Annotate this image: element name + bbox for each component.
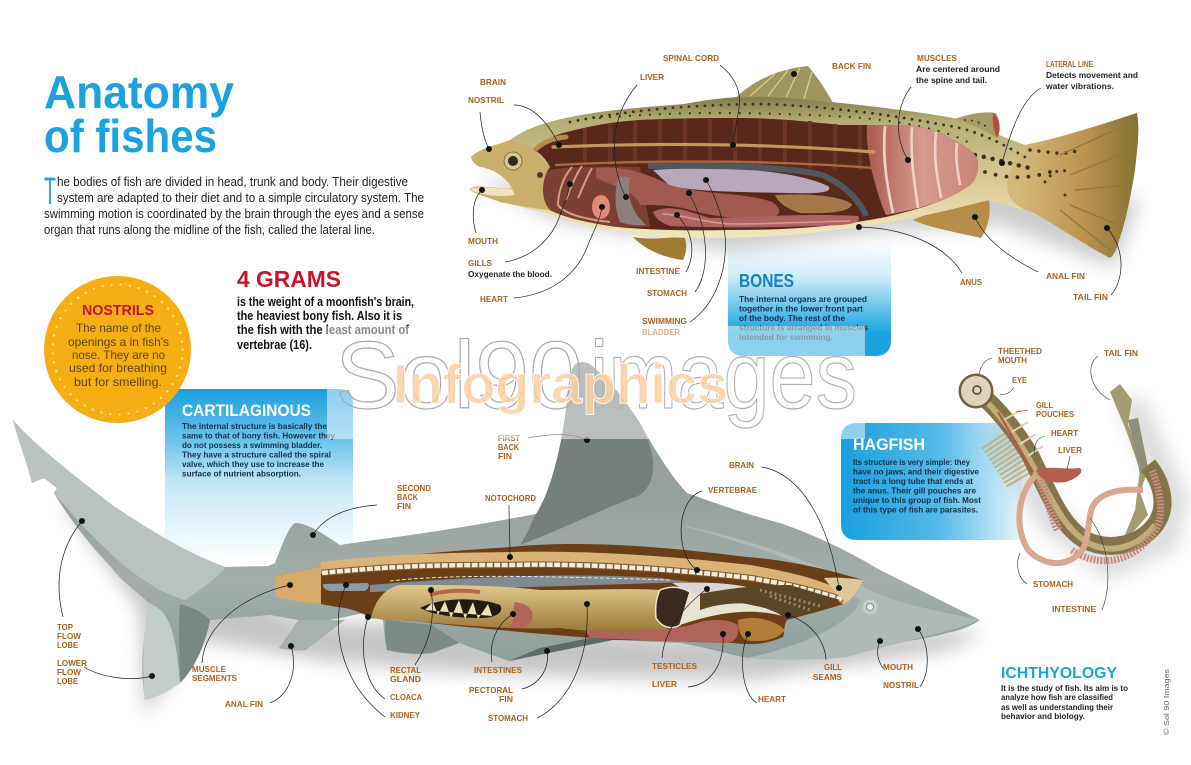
label: liver — [1058, 445, 1082, 470]
label: stomach: STOMACH — [647, 288, 687, 298]
hagfish liver — [1036, 468, 1081, 482]
label: vertebrae: VERTEBRAE — [708, 485, 757, 495]
watermark: Sol90 — [335, 322, 583, 429]
shark heart — [738, 618, 785, 641]
label: stomach — [1018, 553, 1073, 589]
trout lower fins — [633, 200, 990, 260]
text: hagfish description: of this type of fish are parasites. — [853, 504, 978, 514]
intro paragraph: organ that runs along the midline of the fish, called the lateral line. — [44, 223, 375, 237]
label: muscle segments: MUSCLE — [192, 664, 226, 674]
shark valve stomach opening — [656, 587, 690, 628]
label: swimming bladder: SWIMMING — [642, 316, 687, 326]
trout ribs — [585, 119, 860, 170]
label: stomach — [488, 601, 590, 723]
label: back fin: BACK FIN — [832, 61, 871, 71]
text: cartilaginous description: The internal structure is basically the — [182, 421, 327, 431]
trout spinal cord and rib rods — [535, 137, 874, 168]
label: nostril: NOSTRIL — [883, 680, 919, 690]
label: muscle segments — [192, 582, 293, 683]
intro paragraph — [44, 171, 424, 237]
trout intestine — [653, 208, 859, 227]
callout: ichthyology: It is the study of fish. Its aim is to — [1001, 683, 1128, 693]
trout liver — [616, 176, 646, 225]
trout tail rays — [1060, 122, 1132, 250]
text: bones description: structure is arranged in muscles — [739, 322, 868, 332]
label: nostril: NOSTRIL — [468, 95, 504, 105]
callout: nostrils: but for smelling. — [74, 375, 162, 389]
label: heart — [480, 204, 605, 304]
callout: 4 grams — [237, 266, 414, 352]
label: gill pouches — [1016, 400, 1074, 419]
shark spine — [321, 558, 848, 600]
text: bones description: The internal organs are grouped — [739, 294, 867, 304]
label: pectoral fin: PECTORAL — [469, 685, 513, 695]
shark gill seams area — [700, 585, 840, 620]
text: hagfish description: have no jaws, and their digestive — [853, 466, 979, 476]
label: notochord — [485, 493, 536, 560]
text: hagfish description — [853, 457, 981, 514]
label: lower flow lobe: LOWER — [57, 658, 87, 668]
label: mouth: MOUTH — [468, 236, 498, 246]
label: first back fin — [498, 433, 590, 461]
label: liver: LIVER — [652, 679, 677, 689]
title — [44, 66, 234, 162]
trout organ yellow-brown — [775, 194, 852, 213]
label: cloaca: CLOACA — [390, 692, 422, 702]
label: second back fin: SECOND — [397, 483, 431, 493]
label: anal fin: ANAL FIN — [225, 699, 263, 709]
label: lower flow lobe — [57, 658, 155, 686]
label: rectal gland: RECTAL — [390, 665, 421, 675]
label: muscles — [898, 53, 1000, 163]
label: notochord: NOTOCHORD — [485, 493, 536, 503]
trout back fin — [735, 66, 833, 103]
label: theethed mouth: THEETHED — [998, 346, 1042, 356]
label: tail fin — [1073, 225, 1121, 302]
label: anus: ANUS — [960, 277, 982, 287]
shark intestine and spiral valve — [371, 585, 672, 633]
trout swimming bladder — [653, 168, 829, 193]
label: mouth: MOUTH — [883, 662, 913, 672]
label: testicles — [652, 586, 710, 671]
label: heart: HEART — [1051, 428, 1079, 438]
text: hagfish description: unique to this group of fish. Most — [853, 495, 981, 505]
label: muscle segments: SEGMENTS — [192, 673, 237, 683]
text: bones description: intended for swimming. — [739, 332, 833, 342]
label: gill pouches: GILL — [1036, 400, 1053, 410]
heading: cartilaginous: CARTILAGINOUS — [182, 401, 311, 420]
label: anal fin — [972, 214, 1085, 281]
shark body, tail and fins — [13, 362, 980, 700]
shark muscle segments — [275, 567, 321, 604]
panel: bones — [728, 240, 891, 356]
intro paragraph: system are adapted to their diet and to a simple circulatory system. The — [57, 191, 424, 205]
trout stomach — [596, 167, 779, 219]
label: muscles: MUSCLES — [917, 53, 957, 63]
shark liver — [585, 620, 738, 643]
label: lower flow lobe: FLOW — [57, 667, 82, 677]
label: mouth — [877, 638, 913, 672]
label: liver: LIVER — [1058, 445, 1082, 455]
text: bones description — [739, 294, 868, 342]
trout cut-away cavity — [534, 118, 978, 230]
label: swimming bladder: BLADDER — [642, 327, 680, 337]
label: eye — [1000, 375, 1027, 394]
label: heart — [742, 631, 787, 704]
label: nostril — [883, 626, 927, 690]
label: gill seams — [785, 612, 842, 682]
label: first back fin: FIRST — [498, 433, 521, 443]
callout: ichthyology: behavior and biology. — [1001, 711, 1085, 721]
callout: nostrils: openings a in fish's — [68, 335, 169, 349]
label: brain: BRAIN — [480, 77, 506, 87]
label: heart: HEART — [480, 294, 509, 304]
label: second back fin — [310, 483, 431, 538]
label: kidney — [338, 582, 420, 720]
text: bones description: together in the lower front part — [739, 304, 863, 314]
label: rectal gland — [390, 587, 434, 684]
watermark: Infographics — [393, 353, 728, 415]
title: Anatomy — [44, 66, 234, 118]
panel: hagfish — [841, 423, 1022, 540]
callout: 4 grams: vertebrae (16). — [237, 338, 312, 352]
label: testicles: TESTICLES — [652, 661, 697, 671]
label: liver — [614, 72, 664, 200]
label: lateral line: LATERAL LINE — [1046, 59, 1093, 69]
callout: ichthyology: ICHTHYOLOGY — [1001, 665, 1117, 682]
label: nostril — [468, 95, 562, 148]
text: bones description: of the body. The rest of the — [739, 313, 845, 323]
label: heart — [1034, 428, 1079, 455]
hagfish head — [958, 374, 994, 408]
label: brain: BRAIN — [729, 460, 754, 470]
label: intestines — [474, 611, 522, 675]
watermark — [327, 322, 865, 439]
hagfish gut folds — [1040, 470, 1161, 561]
label: tail fin — [1091, 348, 1138, 400]
label: gills: GILLS — [468, 258, 492, 268]
text: cartilaginous description: valve, which they use to increase the — [182, 459, 324, 469]
label: gills: Oxygenate the blood. — [468, 269, 552, 279]
panel: cartilaginous — [165, 389, 353, 560]
label: gills — [468, 181, 573, 279]
hagfish gill frill — [993, 440, 1020, 482]
text: cartilaginous description: surface of nutrient absorption. — [182, 468, 301, 478]
callout: nostrils: used for breathing — [69, 361, 167, 375]
text: cartilaginous description: do not possess a swimming bladder. — [182, 440, 322, 450]
label: anal fin — [225, 643, 294, 709]
text: cartilaginous description: same to that of bony fish. However they — [182, 430, 335, 440]
callout: 4 grams: 4 GRAMS — [237, 266, 341, 292]
text: hagfish description: tract is a long tube that ends at — [853, 476, 973, 486]
text: hagfish description: the anus. Their gill pouches are — [853, 486, 976, 496]
callout: nostrils: nose. They are no — [72, 348, 165, 362]
label: eye: EYE — [1012, 375, 1027, 385]
label: first back fin: FIN — [498, 451, 512, 461]
label: brain — [480, 77, 506, 152]
text: cartilaginous description — [182, 421, 335, 478]
illustration: hagfish — [958, 374, 1175, 565]
callout: ichthyology: analyze how fish are classified — [1001, 692, 1113, 702]
label: second back fin: BACK — [397, 492, 419, 502]
text: cartilaginous description: They have a structure called the spiral — [182, 450, 331, 460]
label: liver — [652, 631, 726, 689]
illustration: shark — [13, 362, 985, 715]
label: theethed mouth — [979, 346, 1042, 374]
label: mouth — [468, 187, 498, 246]
label: spinal cord — [663, 53, 740, 148]
shark kidney — [323, 583, 369, 591]
label: top flow lobe: LOBE — [57, 640, 78, 650]
label: swimming bladder — [642, 177, 725, 337]
labels: trout — [468, 53, 1138, 337]
label: cloaca — [363, 614, 422, 702]
heading: hagfish: HAGFISH — [853, 435, 925, 454]
label: tail fin: TAIL FIN — [1104, 348, 1138, 358]
label: back fin — [791, 61, 871, 77]
label: heart: HEART — [758, 694, 787, 704]
label: gill seams: SEAMS — [813, 672, 842, 682]
label: intestine — [1052, 518, 1108, 614]
label: lateral line — [999, 59, 1138, 166]
shark pectoral fin — [509, 636, 613, 661]
label: gill seams: GILL — [824, 662, 842, 672]
label: gill pouches: POUCHES — [1036, 409, 1074, 419]
label: lateral line: Detects movement and — [1046, 70, 1138, 80]
hagfish stomach tube — [1019, 475, 1143, 563]
label: liver: LIVER — [640, 72, 664, 82]
label: tail fin: TAIL FIN — [1073, 292, 1108, 302]
trout adipose fin — [955, 112, 1000, 138]
intro paragraph: he bodies of fish are divided in head, trunk and body. Their digestive — [57, 175, 408, 189]
label: intestine — [636, 212, 692, 276]
labels: hagfish — [979, 346, 1138, 614]
label: top flow lobe — [57, 518, 85, 650]
label: intestines: INTESTINES — [474, 665, 522, 675]
label: intestine: INTESTINE — [1052, 604, 1096, 614]
callout: nostrils — [44, 276, 191, 423]
label: pectoral fin — [469, 648, 550, 704]
label: brain — [729, 460, 842, 591]
label: intestine: INTESTINE — [636, 266, 680, 276]
label: vertebrae — [681, 485, 757, 573]
label: pectoral fin: FIN — [499, 694, 513, 704]
label: spinal cord: SPINAL CORD — [663, 53, 719, 63]
label: muscles: Are centered around — [916, 64, 1000, 74]
heading: bones: BONES — [739, 271, 794, 291]
trout muscle — [867, 125, 978, 215]
title: of fishes — [44, 110, 217, 162]
intro paragraph: swimming motion is coordinated by the brain through the eyes and a sense — [44, 207, 424, 221]
callout: 4 grams: the fish with the least amount of — [237, 323, 410, 337]
callout: nostrils: NOSTRILS — [82, 302, 154, 319]
label: lateral line: water vibrations. — [1045, 81, 1114, 91]
label: rectal gland: GLAND — [390, 674, 421, 684]
watermark: images — [590, 322, 857, 429]
shark eye — [862, 600, 878, 614]
hagfish tail fin — [1110, 384, 1149, 540]
callout: ichthyology — [1001, 665, 1128, 721]
illustration: trout — [469, 66, 1140, 268]
trout lower-left cavity — [543, 166, 650, 227]
callout: ichthyology: as well as understanding their — [1001, 702, 1114, 712]
label: stomach: STOMACH — [1033, 579, 1073, 589]
trout gill vessels — [558, 166, 610, 222]
label: top flow lobe: TOP — [57, 622, 73, 632]
trout head — [469, 140, 550, 210]
label: stomach — [647, 190, 706, 298]
label: muscles: the spine and tail. — [916, 75, 987, 85]
callout: nostrils: The name of the — [76, 321, 161, 335]
credit: © Sol 90 Images — [1163, 668, 1171, 735]
label: second back fin: FIN — [397, 501, 411, 511]
label: first back fin: BACK — [498, 442, 520, 452]
text: hagfish description: Its structure is very simple: they — [853, 457, 970, 467]
callout: 4 grams: is the weight of a moonfish's brain, — [237, 295, 414, 309]
label: anus — [856, 224, 982, 287]
label: top flow lobe: FLOW — [57, 631, 82, 641]
callout: 4 grams: the heaviest bony fish. Also it is — [237, 309, 402, 323]
label: anal fin: ANAL FIN — [1046, 271, 1085, 281]
shark cut-away cavity — [275, 544, 863, 644]
trout heart — [592, 195, 610, 219]
labels: shark — [57, 433, 927, 723]
hagfish body — [976, 391, 1163, 546]
label: stomach: STOMACH — [488, 713, 528, 723]
label: kidney: KIDNEY — [390, 710, 420, 720]
label: lower flow lobe: LOBE — [57, 676, 78, 686]
trout body and tail — [469, 97, 1138, 258]
shark testicles — [672, 583, 755, 595]
trout spots — [570, 104, 1078, 195]
trout dark vessel — [648, 166, 866, 216]
intro paragraph: T — [44, 171, 56, 213]
label: theethed mouth: MOUTH — [998, 355, 1027, 365]
